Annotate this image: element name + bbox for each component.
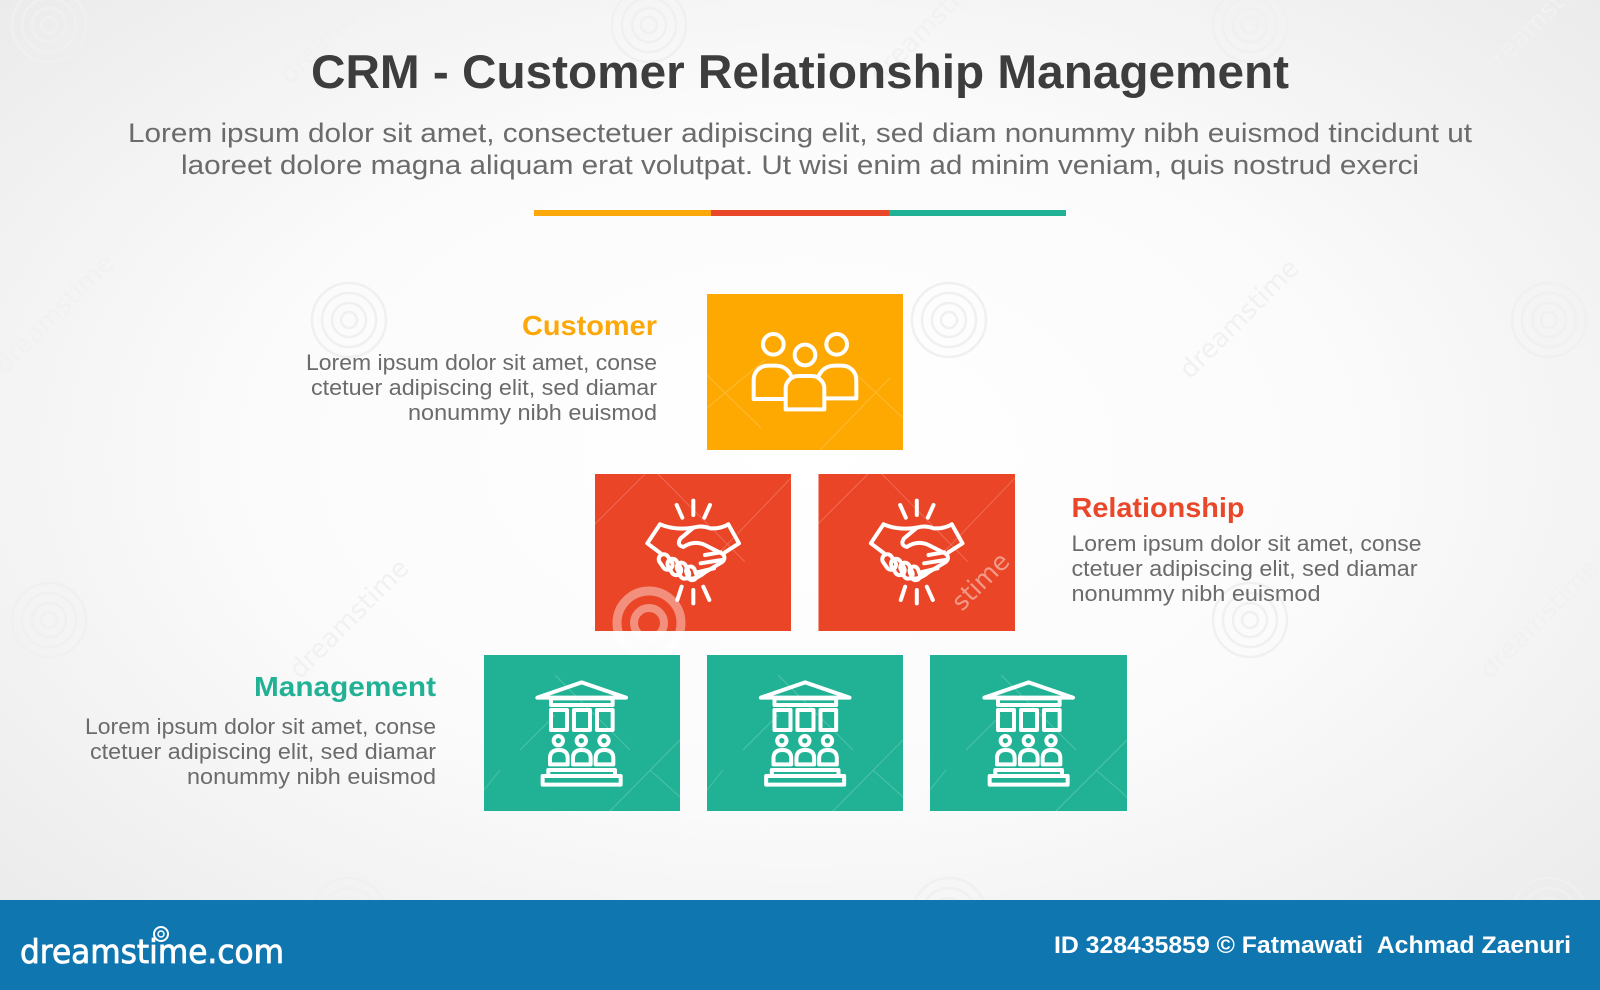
text block: customer: Lorem ipsum dolor sit amet, conse [306,350,657,375]
title: CRM - Customer Relationship Management [311,45,1289,98]
panel: relationship block left [595,474,791,655]
panel: relationship block right [818,474,1015,631]
panel: customer block [707,294,903,450]
text block: relationship: Lorem ipsum dolor sit amet, conse [1072,531,1422,556]
footer bar [0,900,1600,990]
text block: customer: nonummy nibh euismod [408,400,657,425]
text block: relationship: nonummy nibh euismod [1072,581,1320,606]
panel: management block 3 [930,655,1127,811]
text block: management: nonummy nibh euismod [187,764,436,789]
text: dreamstime [284,553,415,685]
tricolor divider [534,210,1066,216]
subtitle text [128,118,1473,180]
text block: management: Lorem ipsum dolor sit amet, conse [85,714,436,739]
text block: relationship: Relationship [1072,492,1244,523]
panel: management block 2 [707,655,903,811]
subtitle text: laoreet dolore magna aliquam erat volutpat. Ut wisi enim ad minim veniam, quis nostrud exerci [181,150,1419,180]
text: dreamstime [1174,253,1305,385]
text block: relationship [1072,492,1422,606]
panel: relationship block right: stime [946,547,1015,616]
text block: customer: Customer [522,310,657,341]
text block: management [85,671,436,789]
subtitle text: Lorem ipsum dolor sit amet, consectetuer adipiscing elit, sed diam nonummy nibh euismod tincidunt ut [128,118,1473,148]
panel: management block 1 [484,655,680,811]
text block: management: Management [254,671,436,702]
footer credit: ID 328435859 © Fatmawati Achmad Zaenuri [1054,932,1571,959]
text block: customer: ctetuer adipiscing elit, sed diamar [311,375,657,400]
text block: management: ctetuer adipiscing elit, sed diamar [90,739,436,764]
text block: customer [306,310,657,425]
footer logo: dreamstime.com [20,932,284,971]
text block: relationship: ctetuer adipiscing elit, sed diamar [1072,556,1418,581]
